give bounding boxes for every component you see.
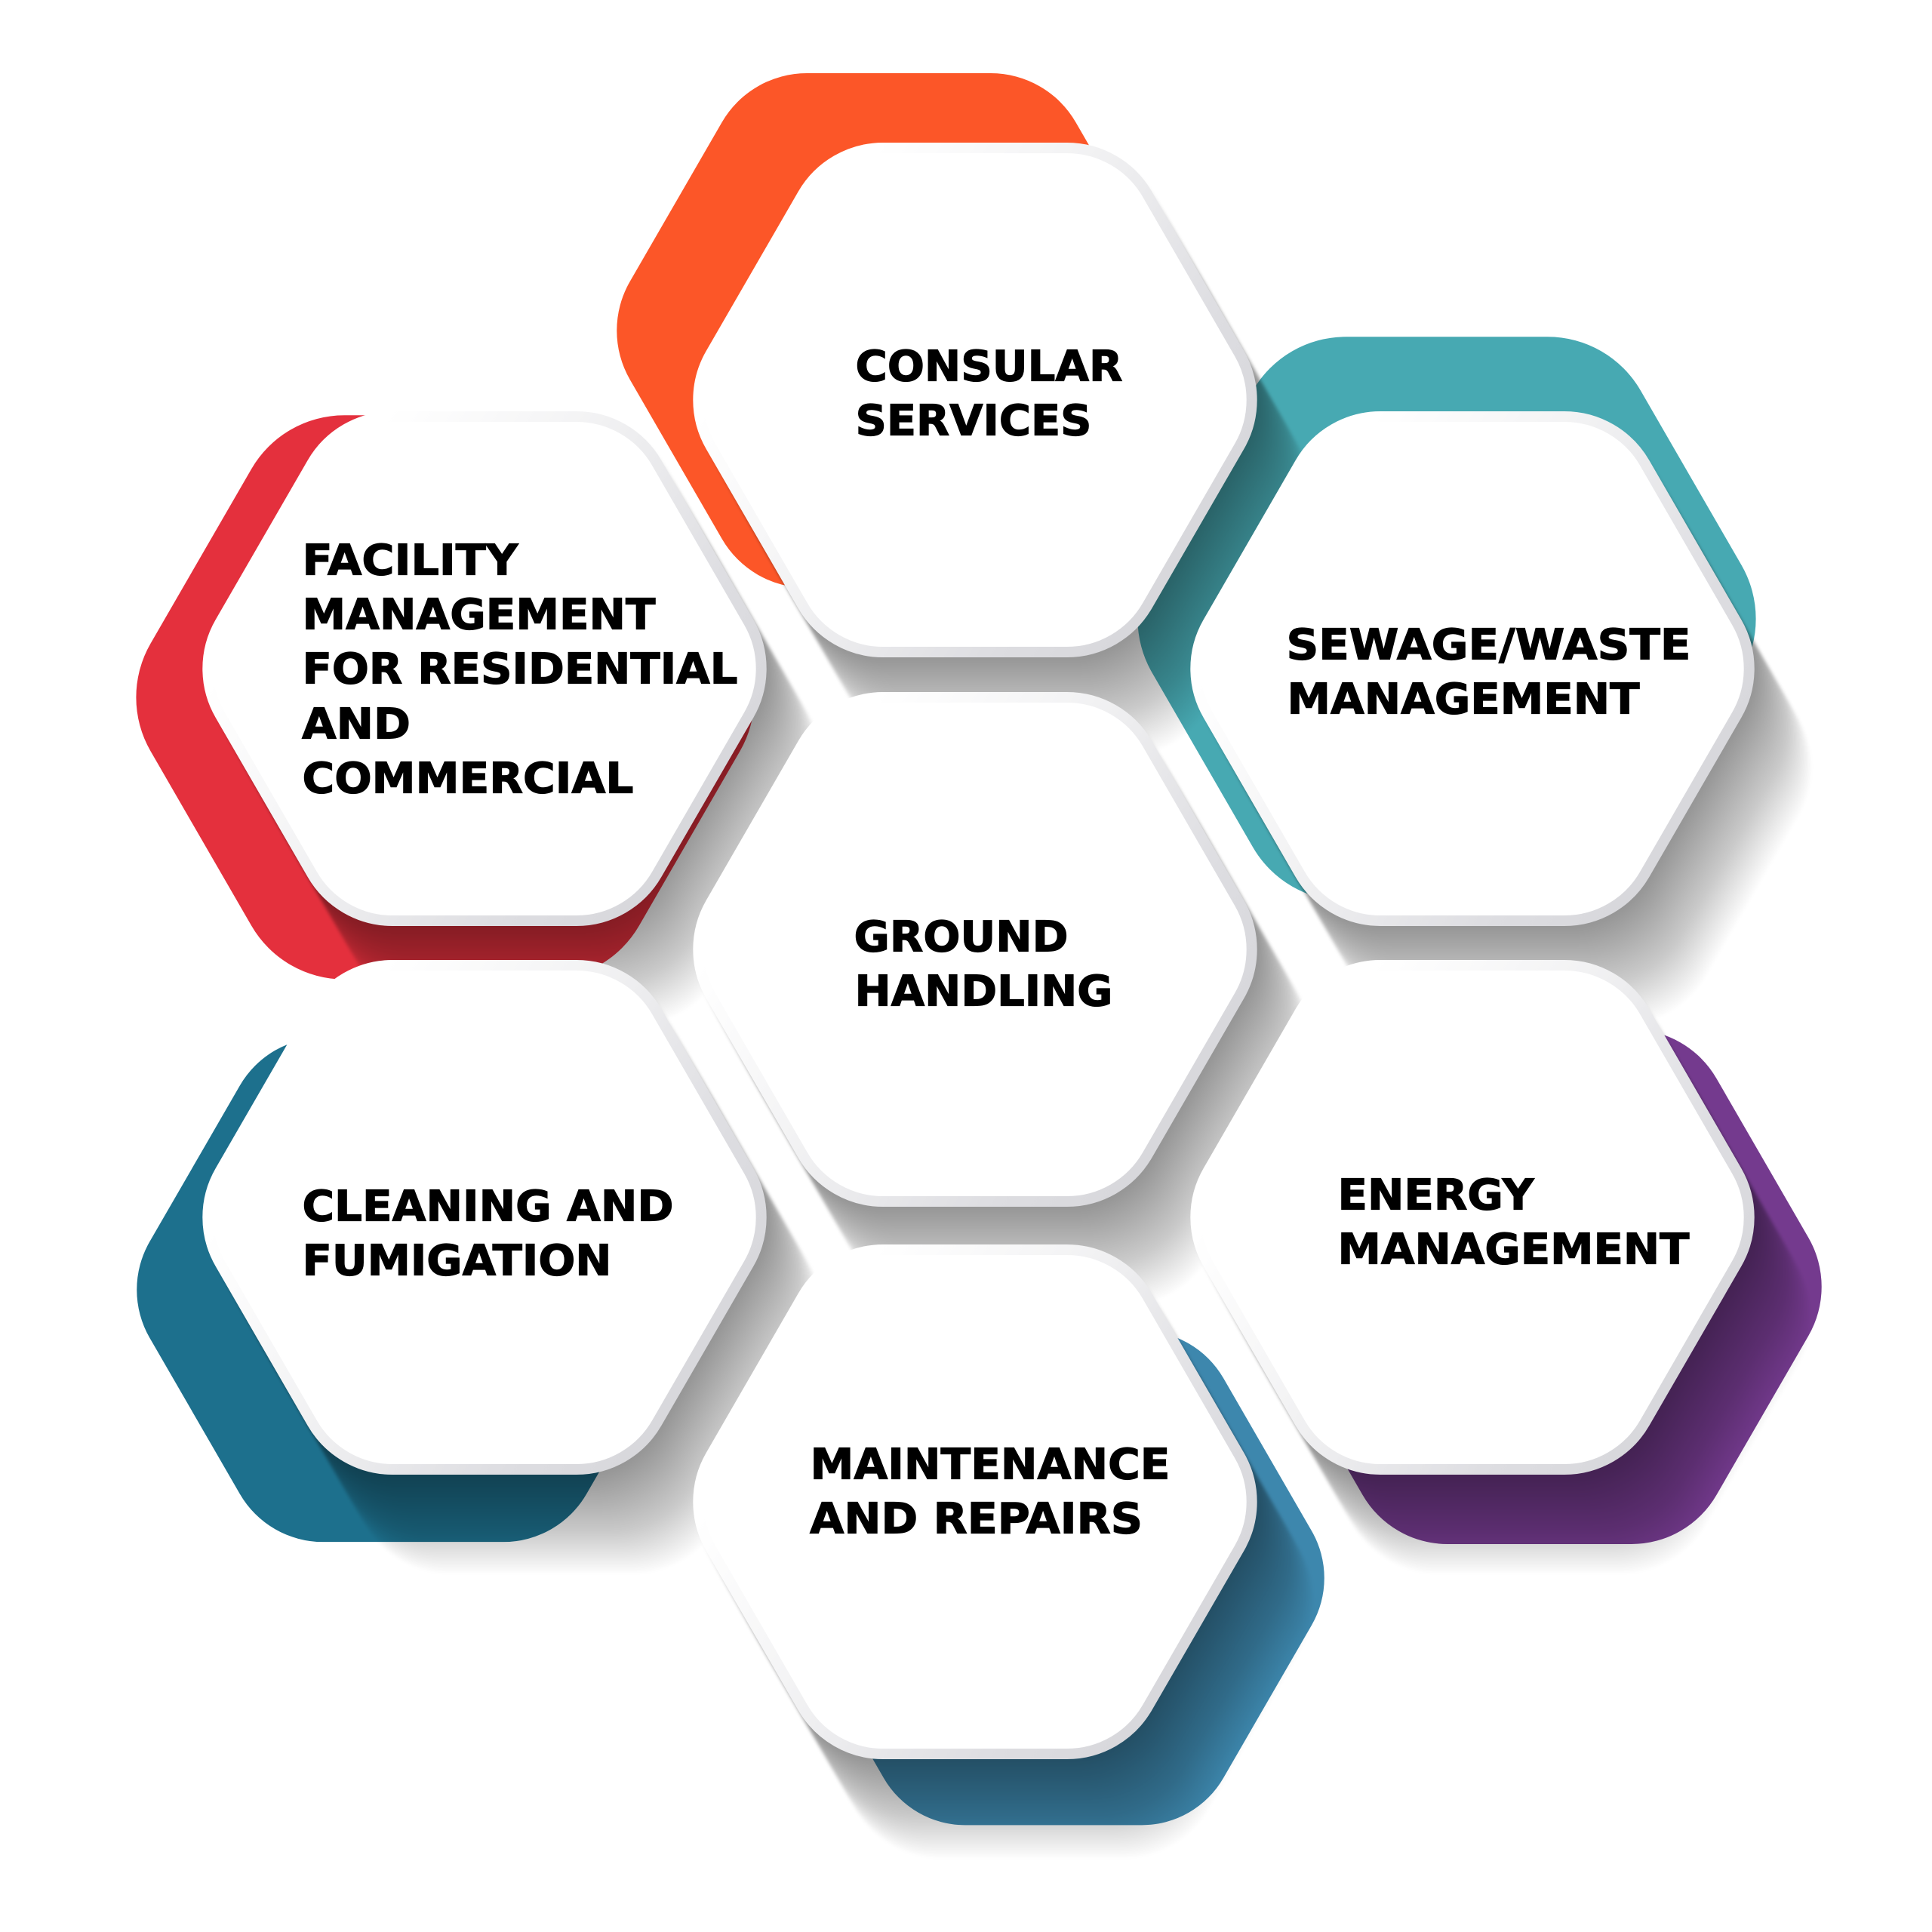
shadow: maintenance and repairs [695,1247,1314,1857]
label: sewage waste management [1286,620,1690,724]
label: consular services: SERVICES [856,397,1091,445]
label: facility management: AND [302,700,411,749]
label: consular services [856,343,1123,445]
hexagon: maintenance and repairs [698,1250,1252,1754]
hexagon: cleaning and fumigation [208,965,761,1469]
label: cleaning and fumigation [302,1182,673,1286]
label: sewage waste management: SEWAGE/WASTE [1286,620,1690,670]
panel: sewage waste management [1192,414,1811,1024]
shadow: facility management [205,414,823,1024]
label: ground handling: HANDLING [854,968,1112,1016]
label: sewage waste management: MANAGEMENT [1287,675,1640,724]
label: ground handling [854,913,1112,1016]
label: maintenance and repairs [810,1440,1170,1544]
label: cleaning and fumigation: CLEANING AND [302,1182,673,1232]
label: cleaning and fumigation: FUMIGATION [302,1236,611,1286]
back hexagon: orange [617,73,1181,588]
label: energy management [1337,1171,1690,1274]
label: energy management: ENERGY [1337,1171,1535,1220]
panel: ground handling [695,695,1314,1305]
shadow: ground handling [695,695,1314,1305]
panel: energy management [1192,963,1811,1573]
shadow: energy management [1192,963,1811,1573]
label: ground handling: GROUND [854,913,1069,961]
back hexagon: purple [1257,1029,1822,1544]
hexagon: energy management [1195,965,1749,1469]
label: consular services: CONSULAR [856,343,1123,391]
back hexagon: steel blue [783,1331,1324,1825]
panel: maintenance and repairs [695,1247,1314,1857]
back hexagon: red [136,415,755,980]
label: facility management [302,536,738,803]
label: facility management: COMMERCIAL [302,755,634,803]
label: maintenance and repairs: MAINTENANCE [811,1440,1170,1490]
label: facility management: FACILITY [302,536,519,586]
panel: cleaning and fumigation [205,963,823,1573]
shadow: sewage waste management [1192,414,1811,1024]
hexagon: ground handling [698,697,1252,1201]
back hexagon: teal [1137,337,1756,901]
label: facility management: MANAGEMENT [302,590,656,640]
shadow: consular services [695,146,1314,755]
label: energy management: MANAGEMENT [1337,1226,1690,1274]
back hexagon: dark teal blue [137,1038,690,1542]
hexagon: facility management [208,417,761,921]
label: facility management: FOR RESIDENTIAL [302,645,738,694]
panel: consular services [695,146,1314,755]
shadow: cleaning and fumigation [205,963,823,1573]
label: maintenance and repairs: AND REPAIRS [810,1494,1143,1544]
panel: facility management [205,414,823,1024]
hexagon: sewage waste management [1195,417,1749,921]
hexagon: consular services [698,148,1252,652]
